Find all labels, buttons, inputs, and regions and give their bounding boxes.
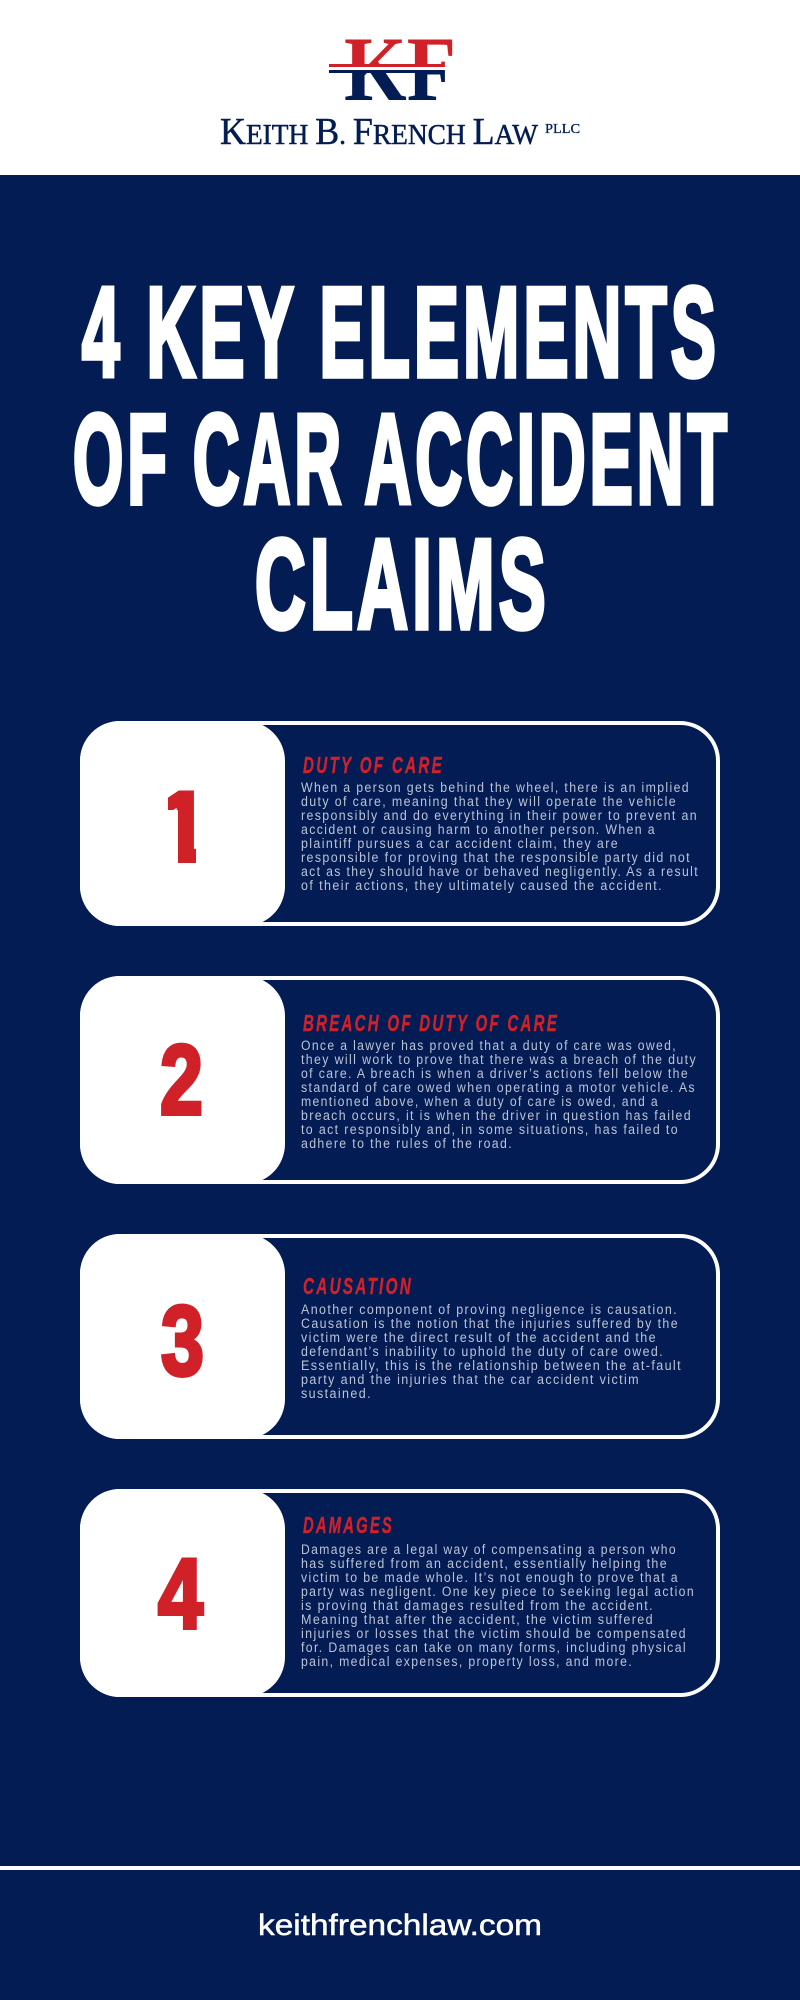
text: duty of care: duty of care, meaning that they will operate the vehicle xyxy=(301,794,677,809)
title: CLAIMS xyxy=(255,513,550,655)
text: breach of duty of care: standard of care owed when operating a motor vehicle. As xyxy=(301,1080,696,1095)
panel: breach of duty of care xyxy=(80,976,718,1184)
text: breach of duty of care: they will work to prove that there was a breach of the duty xyxy=(301,1052,697,1067)
text: causation: Causation is the notion that the injuries suffered by the xyxy=(301,1316,679,1331)
panel: causation xyxy=(80,1234,718,1439)
text: damages: victim to be made whole. It’s not enough to prove that a xyxy=(301,1570,679,1585)
text: damages: is proving that damages resulted from the accident. xyxy=(301,1598,654,1613)
text: damages: pain, medical expenses, property loss, and more. xyxy=(301,1654,633,1669)
heading: causation: CAUSATION xyxy=(303,1273,413,1299)
panel: damages xyxy=(80,1489,718,1697)
text: damages: has suffered from an accident, essentially helping the xyxy=(301,1556,668,1571)
text: duty of care: act as they should have or behaved negligently. As a result xyxy=(301,864,699,879)
heading: damages: DAMAGES xyxy=(303,1512,394,1538)
text: causation: party and the injuries that the car accident victim xyxy=(301,1372,640,1387)
text: breach of duty of care: to act responsibly and, in some situations, has failed to xyxy=(301,1122,679,1137)
number 2: 2 xyxy=(160,1024,203,1135)
number 4: 4 xyxy=(158,1538,203,1649)
text: duty of care: responsible for proving that the responsible party did not xyxy=(301,850,691,865)
heading: breach of duty of care: BREACH OF DUTY OF CARE xyxy=(303,1010,559,1036)
text: causation xyxy=(301,1302,682,1401)
text: duty of care: plaintiff pursues a car accident claim, they are xyxy=(301,836,619,851)
number 1: 1 xyxy=(156,771,210,882)
text: causation: Essentially, this is the relationship between the at-fault xyxy=(301,1358,682,1373)
text: duty of care: When a person gets behind the wheel, there is an implied xyxy=(301,780,690,795)
firm name: KEITH B. FRENCH LAW xyxy=(220,111,539,153)
text: damages: for. Damages can take on many forms, including physical xyxy=(301,1640,687,1655)
logo mark: KF monogram: KF xyxy=(344,18,456,120)
text: causation: sustained. xyxy=(301,1386,372,1401)
text: breach of duty of care: of care. A breach is when a driver’s actions fell below the xyxy=(301,1066,689,1081)
text: breach of duty of care xyxy=(301,1038,697,1151)
text: damages: injuries or losses that the victim should be compensated xyxy=(301,1626,687,1641)
text: damages: Meaning that after the accident, the victim suffered xyxy=(301,1612,654,1627)
firm suffix: PLLC xyxy=(545,122,580,137)
text: breach of duty of care: mentioned above, when a duty of care is owed, and a xyxy=(301,1094,659,1109)
text: duty of care: responsibly and do everything in their power to prevent an xyxy=(301,808,698,823)
text: duty of care: of their actions, they ultimately caused the accident. xyxy=(301,878,663,893)
text: damages: Damages are a legal way of compensating a person who xyxy=(301,1542,677,1557)
text: causation: victim were the direct result of the accident and the xyxy=(301,1330,657,1345)
text: duty of care xyxy=(301,780,699,893)
text: damages: party was negligent. One key piece to seeking legal action xyxy=(301,1584,695,1599)
panel: duty of care xyxy=(80,721,718,926)
heading: duty of care: DUTY OF CARE xyxy=(303,752,444,778)
text: breach of duty of care: adhere to the rules of the road. xyxy=(301,1136,513,1151)
number 3: 3 xyxy=(161,1285,204,1396)
text: damages xyxy=(301,1542,695,1669)
text: duty of care: accident or causing harm to another person. When a xyxy=(301,822,656,837)
text: causation: defendant’s inability to uphold the duty of care owed. xyxy=(301,1344,664,1359)
header band with logo xyxy=(0,0,800,175)
footer website: keithfrenchlaw.com xyxy=(258,1909,542,1942)
text: causation: Another component of proving negligence is causation. xyxy=(301,1302,678,1317)
title xyxy=(73,261,731,655)
text: breach of duty of care: breach occurs, it is when the driver in question has failed xyxy=(301,1108,692,1123)
text: breach of duty of care: Once a lawyer has proved that a duty of care was owed, xyxy=(301,1038,677,1053)
